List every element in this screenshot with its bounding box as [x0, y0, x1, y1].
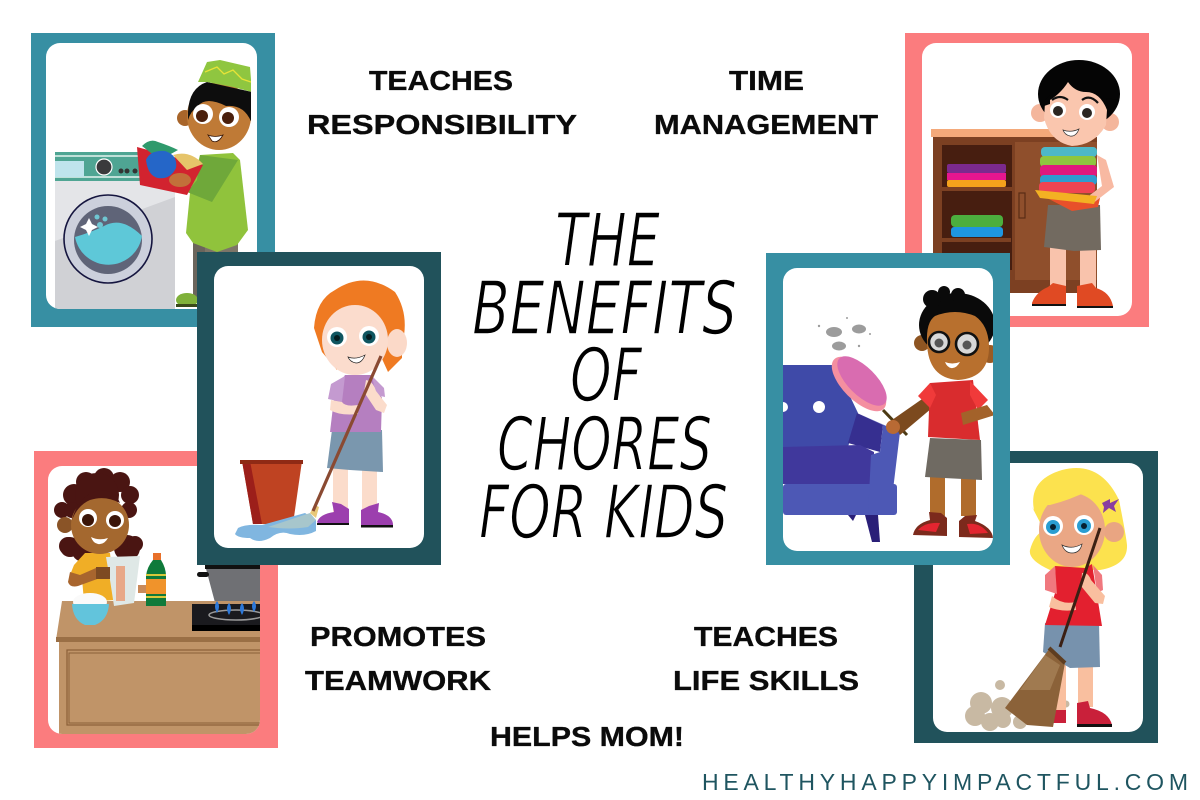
website url: HEALTHYHAPPYIMPACTFUL.COM — [702, 769, 1188, 795]
heading: teaches life skills: TEACHES — [694, 621, 838, 652]
icon: wardrobe — [931, 129, 1097, 293]
boy figure — [137, 60, 252, 307]
title: THE — [555, 198, 660, 284]
girl figure — [313, 280, 407, 528]
panel: boy folding clothes — [905, 33, 1149, 327]
title: CHORES — [497, 402, 712, 488]
heading: teaches responsibility: RESPONSIBILITY — [307, 109, 577, 140]
panel: girl mopping — [197, 252, 441, 565]
icon: red bucket — [240, 460, 303, 524]
boy figure — [886, 286, 999, 538]
title — [472, 198, 737, 556]
icon: feather duster — [832, 356, 908, 436]
panel: girl cooking — [34, 451, 278, 748]
icon: dust clouds — [818, 317, 871, 350]
heading: time management: TIME — [729, 65, 804, 96]
heading: teaches responsibility — [307, 65, 577, 140]
heading: promotes teamwork: TEAMWORK — [305, 665, 491, 696]
title: FOR KIDS — [479, 470, 728, 556]
heading: teaches responsibility: TEACHES — [369, 65, 513, 96]
heading: helps mom: HELPS MOM! — [490, 721, 684, 752]
title: BENEFITS — [472, 266, 737, 352]
heading: teaches life skills: LIFE SKILLS — [673, 665, 859, 696]
heading: time management — [654, 65, 878, 140]
heading: teaches life skills — [673, 621, 859, 696]
heading: promotes teamwork — [305, 621, 491, 696]
icon: kitchen counter — [56, 601, 269, 734]
girl figure — [965, 468, 1127, 731]
heading: time management: MANAGEMENT — [654, 109, 878, 140]
icon: washing machine — [55, 152, 175, 309]
boy figure — [1031, 60, 1120, 308]
title: OF — [570, 333, 643, 419]
panel: boy doing laundry — [31, 33, 275, 327]
icon: mop — [235, 505, 319, 541]
panel: boy dusting sofa — [766, 253, 1010, 565]
girl figure — [54, 468, 166, 625]
panel: girl sweeping — [914, 451, 1158, 743]
icon: stove and pot — [197, 565, 260, 601]
icon: blue sofa — [778, 365, 900, 542]
heading: promotes teamwork: PROMOTES — [310, 621, 486, 652]
